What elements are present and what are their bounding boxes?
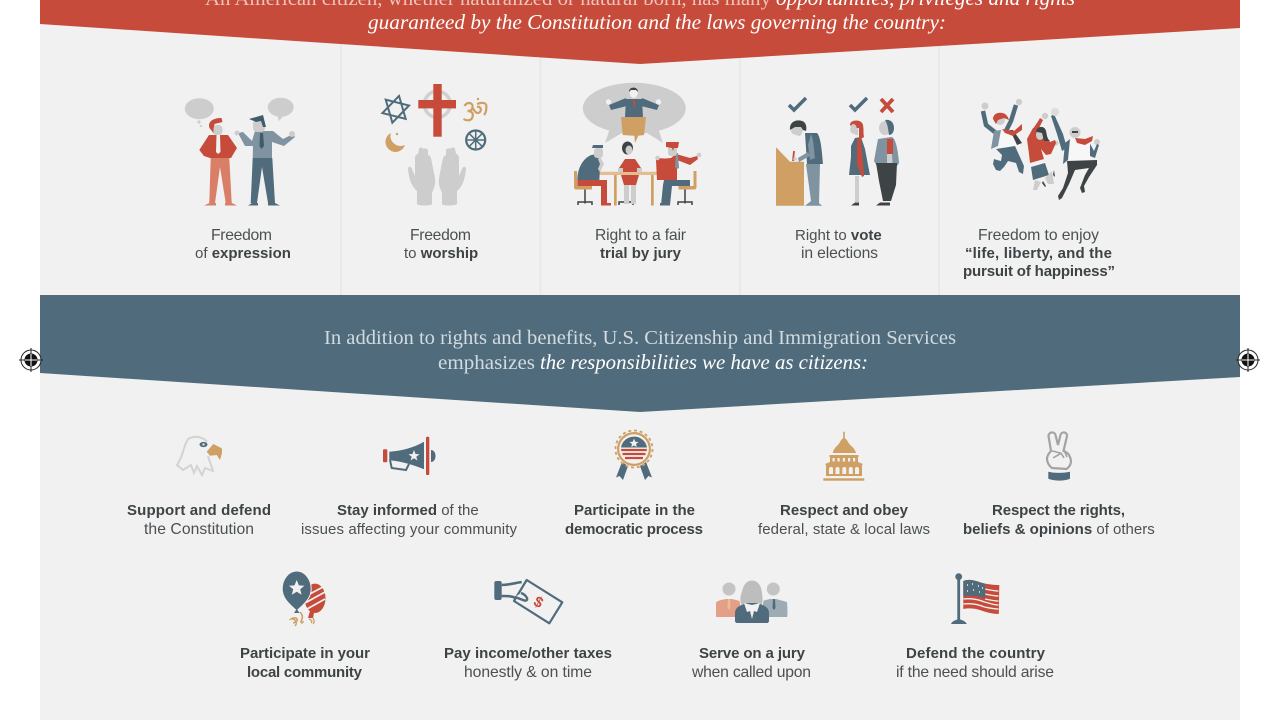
icon: hand with tax bill: [494, 580, 562, 623]
responsibility: respect the laws: [758, 432, 930, 538]
banner text: guaranteed by the Constitution and the laws governing the country:: [368, 10, 946, 34]
label: support and defend: Support and defend: [127, 502, 271, 519]
responsibility: democratic process: [565, 430, 703, 538]
label: stay informed: issues affecting your community: [301, 521, 518, 538]
icon: three jurors: [716, 580, 787, 623]
label: support and defend: the Constitution: [144, 521, 254, 538]
panel: freedom to worship: [381, 84, 486, 262]
label: defend the country: if the need should arise: [896, 664, 1054, 681]
label: local community: local community: [247, 664, 363, 681]
label: respect and obey: Respect and obey: [780, 502, 909, 519]
responsibility: serve on a jury: [691, 580, 811, 681]
responsibility: respect others: [963, 432, 1155, 538]
label: respect the rights: of others: [1096, 521, 1155, 538]
banner text: the responsibilities we have as citizens:: [540, 350, 868, 374]
responsibility: local community: [240, 571, 370, 681]
panel: trial by jury: [574, 83, 701, 262]
label: freedom to worship: to: [404, 245, 421, 262]
label: freedom of expression: expression: [212, 245, 291, 262]
icon: right registration mark: [1236, 348, 1260, 372]
icon: religious symbols and hands: [381, 84, 486, 206]
label: pursuit of happiness: Freedom to enjoy: [978, 227, 1099, 244]
label: trial by jury: trial by jury: [600, 245, 682, 262]
panel: pursuit of happiness: [963, 99, 1115, 280]
icon: capitol building: [823, 432, 864, 481]
label: pursuit of happiness: “life, liberty, and the: [965, 245, 1112, 262]
label: right to vote: vote: [851, 227, 882, 244]
label: defend the country: Defend the country: [906, 645, 1046, 662]
label: local community: Participate in your: [240, 645, 370, 662]
icon: ribbon medal: [616, 430, 652, 480]
icon: hand with tax bill: $: [531, 593, 547, 612]
icon: left registration mark: [19, 348, 43, 372]
responsibility: support and defend the constitution: [127, 437, 271, 538]
label: right to vote: Right to: [795, 227, 851, 244]
label: pay taxes: honestly & on time: [464, 664, 592, 681]
label: right to vote: in elections: [801, 245, 878, 262]
label: freedom to worship: worship: [420, 245, 478, 262]
icon: jury and speaker: [574, 83, 701, 206]
banner: responsibilities introduction: [40, 295, 1240, 412]
label: stay informed: Stay informed: [337, 502, 441, 519]
responsibility: defend the country: [896, 573, 1054, 681]
label: freedom of expression: of: [195, 245, 212, 262]
icon: three people jumping: [982, 99, 1100, 200]
responsibility: stay informed: [301, 437, 518, 538]
label: trial by jury: Right to a fair: [595, 227, 686, 244]
icon: two men talking: [185, 98, 295, 206]
banner text: [205, 0, 1075, 34]
icon: american flag: [951, 573, 999, 624]
panel: freedom of expression: [185, 98, 295, 262]
label: freedom to worship: Freedom: [410, 227, 471, 244]
label: respect and obey: federal, state & local laws: [758, 521, 930, 538]
label: freedom of expression: Freedom: [211, 227, 272, 244]
label: respect the rights: beliefs & opinions: [963, 521, 1096, 538]
banner text: emphasizes: [438, 352, 535, 374]
icon: megaphone: [383, 437, 436, 475]
icon: voters and ballot checks: [776, 98, 899, 206]
label: democratic process: democratic process: [565, 521, 703, 538]
icon: peace sign hand: [1047, 432, 1071, 481]
banner: rights introduction: [40, 0, 1240, 64]
label: stay informed: of the: [441, 502, 479, 519]
icon: eagle: [177, 437, 222, 475]
banner text: In addition to rights and benefits, U.S. Citizenship and Immigration Services: [324, 327, 956, 349]
icon: balloons: [282, 571, 326, 626]
label: pay taxes: Pay income/other taxes: [444, 645, 612, 662]
label: serve on a jury: when called upon: [691, 664, 811, 681]
label: respect the rights: Respect the rights,: [992, 502, 1125, 519]
banner text: [324, 327, 956, 374]
panel: right to vote: [776, 98, 899, 262]
responsibility: pay taxes: [444, 580, 612, 681]
label: serve on a jury: Serve on a jury: [699, 645, 806, 662]
label: pursuit of happiness: pursuit of happiness”: [963, 263, 1115, 280]
label: democratic process: Participate in the: [574, 502, 695, 519]
